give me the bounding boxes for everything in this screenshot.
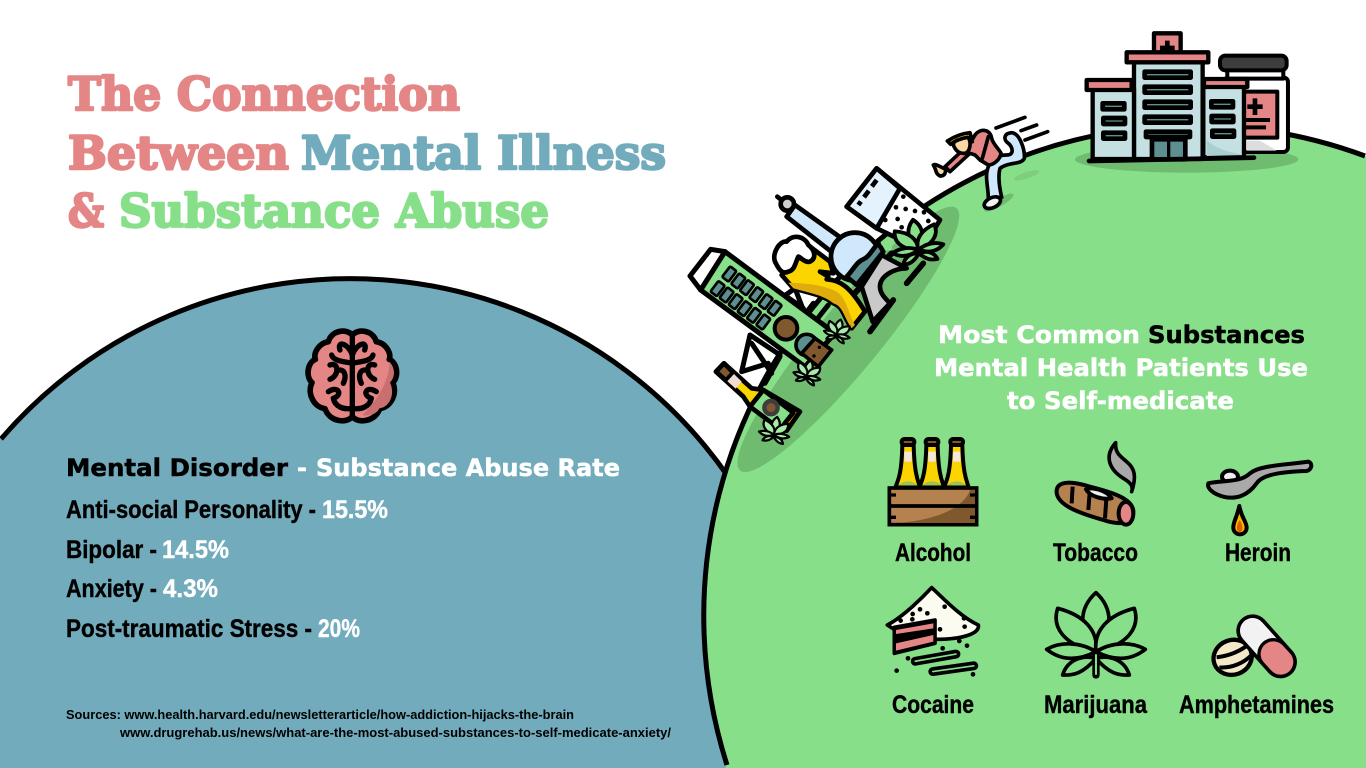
label: cocaine: Cocaine (892, 691, 974, 719)
icon: beer bottle (716, 363, 800, 431)
text block: disorder rates: Bipolar - (66, 536, 157, 564)
heading: most common substances: to Self-medicate (1007, 387, 1234, 415)
icon: beer mug (774, 237, 865, 328)
icon: pills (1209, 631, 1281, 680)
text block: disorder rates: Post-traumatic Stress - (66, 615, 312, 643)
icon: marijuana (1047, 593, 1145, 675)
panel: substances hill (702, 125, 1366, 768)
icon: cigarette pack (690, 249, 835, 367)
label: heroin: Heroin (1225, 539, 1291, 567)
label: marijuana: Marijuana (1044, 691, 1148, 719)
heading: mental disorder rate: - (297, 454, 307, 482)
illustration: substances sliding down the hill (690, 168, 981, 491)
heading: mental disorder rate (66, 454, 620, 482)
shadow: foot (983, 191, 1015, 214)
shadow under substances (716, 188, 981, 491)
panel: mental illness circle (0, 278, 810, 768)
title: Between (68, 126, 289, 180)
text block: disorder rates: Anxiety - (66, 575, 157, 603)
icon: grey arch (862, 255, 923, 332)
label: tobacco: Tobacco (1053, 539, 1138, 567)
title (68, 67, 666, 238)
heading: most common substances: Mental Health Patients Use (934, 354, 1308, 382)
label: amphetamines: Amphetamines (1179, 691, 1334, 719)
text block: sources: www.drugrehab.us/news/what-are-the-most-abused-substances-to-self-medicate-anxiety/ (119, 726, 672, 740)
title: & (68, 184, 104, 238)
text block: sources (66, 708, 672, 740)
heading: most common substances: Most Common (938, 321, 1140, 349)
icon: spoon with drop (1208, 462, 1311, 534)
icon: alcohol crate (889, 439, 977, 525)
icon: pill jar (1220, 56, 1288, 152)
title: The Connection (68, 67, 460, 121)
title: Mental Illness (301, 126, 666, 180)
speed lines (996, 117, 1048, 140)
illustration: running man (933, 117, 1048, 214)
text block: disorder rates: 20% (318, 615, 360, 643)
icon: brain (308, 331, 397, 421)
heading: most common substances (934, 321, 1308, 415)
icon: powder bag (847, 168, 940, 250)
title: Substance Abuse (119, 184, 549, 238)
text block: disorder rates: 14.5% (162, 536, 229, 564)
text block: disorder rates: Anti-social Personality - (66, 496, 316, 524)
icon: flask (777, 197, 892, 297)
illustration: hospital and pill jar (1075, 33, 1298, 173)
text block: disorder rates: 4.3% (163, 575, 218, 603)
text block: disorder rates: 15.5% (322, 496, 388, 524)
text block: disorder rates (66, 496, 388, 643)
icon: cocaine pile (887, 588, 978, 677)
heading: mental disorder rate: Mental Disorder (66, 454, 288, 482)
icon: marijuana leaves (758, 215, 946, 445)
heading: mental disorder rate: Substance Abuse Rate (316, 454, 620, 482)
icon: cigar (1057, 443, 1134, 525)
truss (742, 288, 828, 383)
label: alcohol: Alcohol (895, 539, 971, 567)
heading: most common substances: Substances (1148, 321, 1305, 349)
man (933, 130, 1024, 211)
text block: sources: Sources: www.health.harvard.edu/newsletterarticle/how-addiction-hijacks-the-brain (66, 708, 574, 722)
icon: hospital (1087, 33, 1254, 161)
